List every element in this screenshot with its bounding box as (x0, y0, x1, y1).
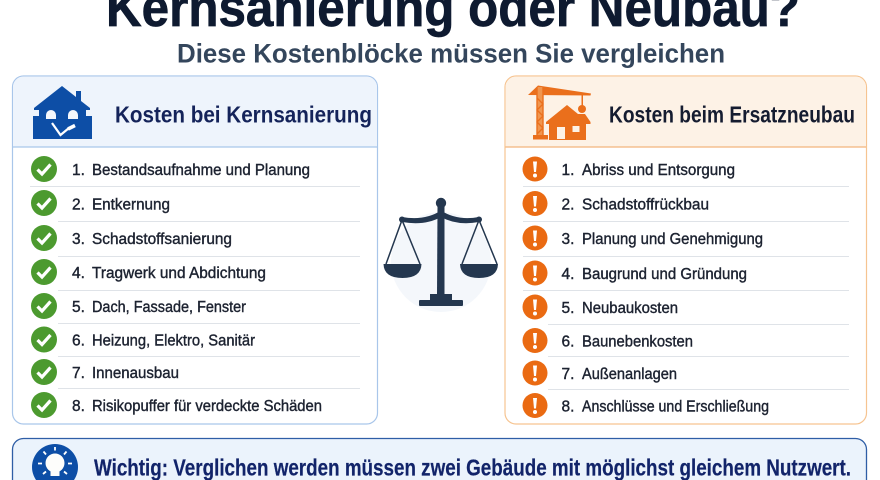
list item 6: 6. (72, 332, 85, 350)
list item 4 (522, 260, 747, 286)
list item 8: 8. (562, 398, 574, 416)
list item 3: Planung und Genehmigung (582, 231, 763, 248)
list item 2: 2. (562, 196, 574, 214)
list item 1: 1. (72, 162, 85, 179)
list item 1: Abriss und Entsorgung (582, 162, 735, 179)
list item 4: Tragwerk und Abdichtung (92, 265, 266, 282)
list item 5 (522, 294, 678, 320)
list item 6: Heizung, Elektro, Sanitär (92, 332, 255, 350)
list item 8: 8. (72, 398, 85, 415)
list item 1: 1. (562, 162, 574, 179)
list item 2 (31, 190, 170, 216)
icon: balance scale (384, 198, 498, 312)
list item 2: 2. (72, 196, 85, 214)
list item 4: 4. (72, 265, 85, 282)
list item 4: Baugrund und Gründung (582, 266, 747, 283)
list item 5: Neubaukosten (582, 300, 678, 317)
list item 3 (522, 226, 763, 250)
list item 3 (31, 225, 232, 251)
list item 5: Dach, Fassade, Fenster (92, 299, 246, 316)
heading: Kosten bei Kernsanierung: Kosten bei Kernsanierung (115, 102, 372, 128)
list item 5 (31, 293, 246, 319)
list item 1 (522, 156, 735, 182)
list item 1 (31, 156, 310, 182)
list item 6 (31, 326, 255, 352)
list item 2 (522, 191, 709, 216)
list item 8: Risikopuffer für verdeckte Schäden (92, 398, 322, 415)
list item 4: 4. (562, 266, 574, 283)
list item 7: Innenausbau (92, 365, 179, 382)
list item 6: 6. (562, 334, 574, 350)
list item 7 (31, 359, 179, 385)
callout: Wichtig (12, 438, 866, 480)
list item 7: 7. (72, 365, 85, 382)
list item 8 (522, 393, 769, 418)
icon: house with wrench (33, 86, 92, 139)
list item 3: 3. (562, 231, 574, 248)
list item 5: 5. (562, 300, 574, 317)
list item 3: 3. (72, 231, 85, 248)
list item 6: Baunebenkosten (582, 334, 693, 350)
list item 8 (31, 392, 322, 418)
list item 1: Bestandsaufnahme und Planung (92, 162, 310, 179)
panel: Kosten beim Ersatzneubau (505, 76, 866, 424)
list item 6 (522, 328, 693, 353)
list item 4 (31, 259, 266, 285)
list item 7: Außenanlagen (582, 366, 677, 383)
list item 7 (522, 360, 677, 386)
icon: crane and house (528, 86, 591, 140)
subtitle: Diese Kostenblöcke müssen Sie vergleichen (177, 38, 725, 68)
list item 3: Schadstoffsanierung (92, 231, 232, 248)
list item 7: 7. (562, 366, 574, 383)
list item 5: 5. (72, 299, 85, 316)
panel header: Ersatzneubau (506, 76, 866, 147)
list item 2: Entkernung (92, 196, 170, 214)
panel header: Kernsanierung (13, 76, 377, 147)
list item 2: Schadstoffrückbau (582, 196, 709, 214)
panel: Kosten bei Kernsanierung (12, 76, 378, 424)
list item 8: Anschlüsse und Erschließung (582, 398, 769, 416)
icon: light bulb (32, 444, 78, 480)
